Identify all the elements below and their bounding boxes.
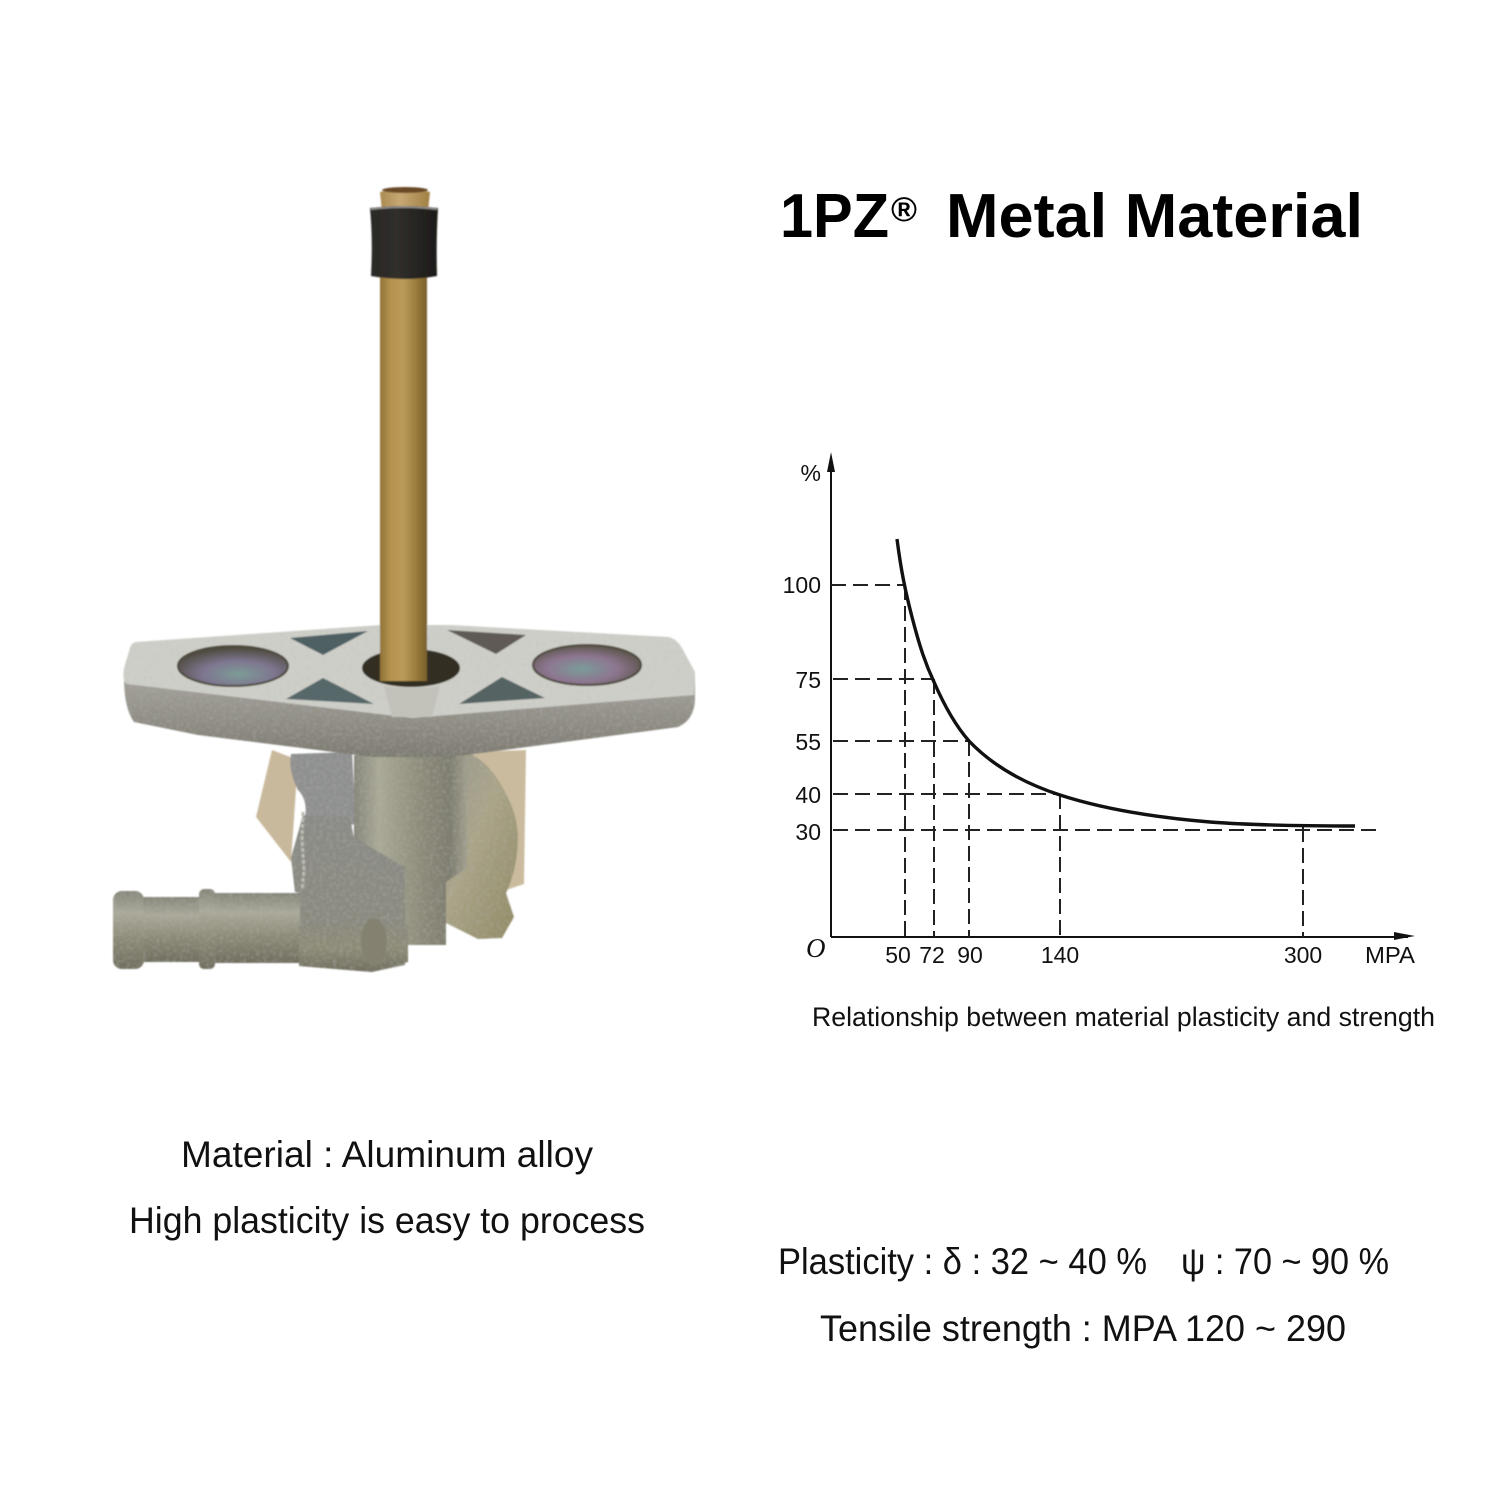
horizontal dashed guides: [831, 585, 1378, 830]
right oval hole: [533, 645, 641, 685]
left oval hole: [178, 646, 288, 686]
rubber sleeve: [370, 206, 438, 279]
y axis labels: 40: [795, 782, 821, 808]
material text block: High plasticity is easy to process: [129, 1200, 645, 1241]
x axis labels: 140: [1041, 942, 1079, 968]
x axis labels: 90: [957, 942, 983, 968]
centre hole lip: [384, 686, 440, 717]
plasticity and strength text block: Plasticity : δ : 32 ~ 40 %: [778, 1241, 1147, 1282]
x axis labels: 300: [1284, 942, 1322, 968]
sleeve top highlight: [371, 207, 437, 209]
upper left wing: [290, 752, 356, 825]
chart: plasticity vs strength: [783, 452, 1416, 968]
material text block: Material : Aluminum alloy: [181, 1134, 593, 1175]
tip opening: [382, 187, 428, 193]
curve: [897, 539, 1355, 826]
plasticity and strength text block: [778, 1241, 1389, 1349]
mounting plate top: [123, 625, 695, 718]
y axis labels: %: [801, 460, 821, 486]
nozzle plug: [361, 918, 387, 966]
centre hole: [362, 649, 460, 687]
title: Metal Material: [946, 182, 1363, 251]
y axis labels: 30: [795, 819, 821, 845]
axes: [831, 458, 1408, 937]
weld seam: [302, 812, 304, 890]
x axis labels: MPA: [1365, 942, 1416, 968]
triangular cut-outs: [286, 630, 545, 704]
y axis labels: 100: [783, 572, 821, 598]
plasticity and strength text block: Tensile strength : MPA 120 ~ 290: [820, 1308, 1346, 1349]
mounting plate side: [124, 676, 695, 757]
right disc: [440, 752, 518, 939]
x axis labels: 72: [919, 942, 945, 968]
product photo: fuel valve: [113, 187, 695, 972]
hose nozzle: [113, 889, 305, 969]
welded elbow: [291, 815, 405, 972]
plasticity and strength text block: ψ : 70 ~ 90 %: [1181, 1241, 1389, 1282]
x axis labels: 50: [885, 942, 911, 968]
y axis labels: 75: [795, 667, 821, 693]
title: 1PZ: [780, 182, 889, 251]
brass tube: [380, 270, 427, 681]
origin label: O: [806, 933, 826, 963]
elbow lower shading: [299, 925, 408, 972]
axis arrowheads: [827, 452, 1415, 940]
y axis labels: 55: [795, 729, 821, 755]
chart caption: Relationship between material plasticity and strength: [812, 1002, 1435, 1032]
x axis labels: [885, 942, 1416, 968]
brass tip: [380, 189, 430, 212]
title: ®: [891, 191, 917, 229]
material text block: [129, 1134, 645, 1241]
vertical dashed guides: [905, 585, 1303, 937]
tan back plate: [256, 750, 526, 892]
y axis labels: [783, 460, 821, 845]
central cylinder: [354, 755, 467, 945]
